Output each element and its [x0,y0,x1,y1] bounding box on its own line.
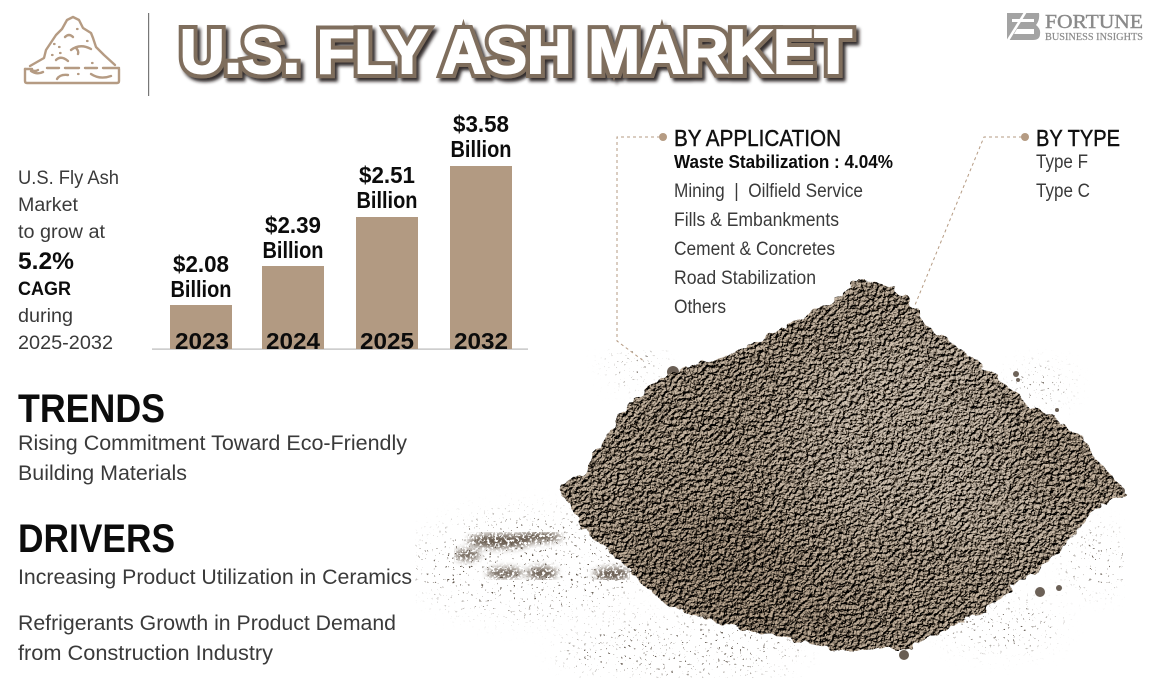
connector: by application [617,133,667,362]
bar 2024: 2024 [266,328,320,354]
bar 2025: Billion [356,187,418,213]
growth statement: CAGR [18,279,71,300]
growth statement: 5.2% [18,248,74,275]
title: U.S. FLY ASH MARKET [180,18,852,87]
bar 2024: $2.39 [265,212,321,238]
drivers section: from Construction Industry [18,642,274,665]
by application list: Road Stabilization [674,268,816,289]
icon: fly ash pile [25,17,119,83]
bar 2023: Billion [170,276,232,302]
logo: Fortune Business Insights [1006,11,1143,43]
by application list: Waste Stabilization : 4.04% [674,152,893,172]
drivers section: Increasing Product Utilization in Ceramics [18,566,412,589]
trends section [18,387,408,485]
connector: by type [915,133,1029,305]
pile light and shadow shading [620,330,1070,647]
bar 2032 [450,111,512,354]
logo: Fortune Business Insights: FORTUNE [1045,11,1143,33]
bar 2025: 2025 [360,328,414,354]
bar 2024 [262,212,324,354]
bar 2032: Billion [450,136,512,162]
header divider [148,13,149,96]
by application list: Fills & Embankments [674,210,839,231]
scattered dust [415,349,1125,678]
pile body [560,280,1127,650]
by type list: Type F [1036,152,1088,173]
bar 2025 [356,162,418,354]
by application list [674,125,893,318]
title: U.S. FLY ASH MARKET [180,18,852,87]
by application list: Cement & Concretes [674,239,835,260]
growth statement: 2025-2032 [18,333,113,354]
bar 2032: $3.58 [453,111,509,137]
growth statement: during [18,306,73,327]
growth statement: U.S. Fly Ash [18,168,119,189]
drivers section [18,517,412,665]
by type list: Type C [1036,181,1090,202]
logo mark [1006,12,1040,41]
bar 2032: 2032 [454,328,508,354]
dust clumps left [454,532,630,580]
by application list: Mining | Oilfield Service [674,181,863,202]
growth statement [18,168,119,354]
growth statement: to grow at [18,222,106,243]
growth statement: Market [18,195,79,216]
bar 2023: $2.08 [173,251,229,277]
drivers section: Refrigerants Growth in Product Demand [18,612,396,635]
bar 2025: $2.51 [359,162,415,188]
bar 2023 [170,251,232,354]
by type list [1036,125,1120,202]
by type list: BY TYPE [1036,125,1120,151]
by application list: BY APPLICATION [674,125,841,151]
trends section: Building Materials [18,462,187,485]
bar 2023: 2023 [175,328,229,354]
bar chart [152,111,528,354]
fly ash pile photo [415,280,1127,678]
trends section: TRENDS [18,387,165,431]
drivers section: DRIVERS [18,517,175,561]
by application list: Others [674,297,726,318]
logo: Fortune Business Insights: BUSINESS INSIGHTS [1045,32,1143,43]
trends section: Rising Commitment Toward Eco-Friendly [18,432,408,455]
bar 2024: Billion [262,237,324,263]
